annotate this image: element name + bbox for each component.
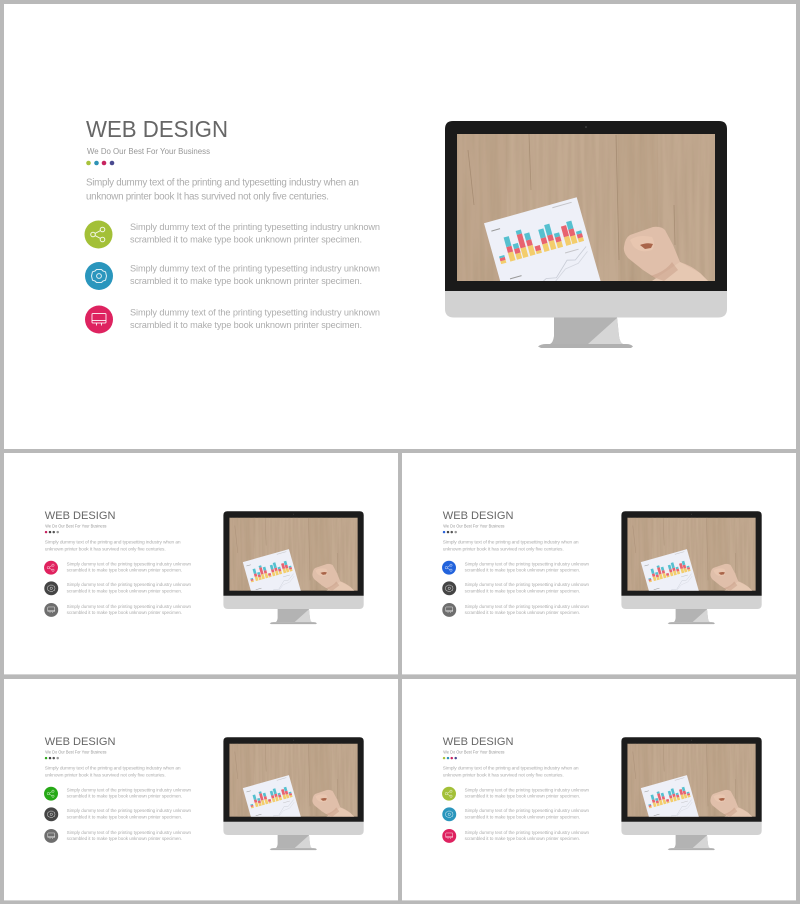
feature text 2: scrambled it to make type book unknown printer specimen.: [465, 588, 580, 593]
title: WEB DESIGN: [45, 736, 115, 748]
feature text 3: Simply dummy text of the printing typesetting industry unknown: [465, 830, 590, 835]
feature text 2: [67, 582, 192, 593]
intro text: Simply dummy text of the printing and typesetting industry when an: [443, 539, 579, 545]
subtitle: We Do Our Best For Your Business: [443, 524, 504, 529]
intro text: Simply dummy text of the printing and typesetting industry when an: [45, 765, 181, 771]
colour dots: [45, 757, 59, 759]
icon: gear: [44, 581, 58, 595]
intro text: [45, 765, 181, 778]
icon: monitor: [442, 829, 456, 843]
feature text 2: scrambled it to make type book unknown printer specimen.: [67, 588, 182, 593]
feature text 1: [130, 222, 380, 244]
intro text: unknown printer book It has survived not only five centuries.: [86, 192, 329, 202]
feature text 1: scrambled it to make type book unknown printer specimen.: [67, 794, 182, 799]
title: WEB DESIGN: [86, 116, 228, 142]
intro text: [45, 539, 181, 552]
icon: monitor: [44, 603, 58, 617]
feature text 2: scrambled it to make type book unknown printer specimen.: [130, 276, 362, 286]
subtitle: We Do Our Best For Your Business: [45, 750, 106, 755]
intro text: unknown printer book It has survived not only five centuries.: [45, 546, 166, 552]
feature text 1: Simply dummy text of the printing typesetting industry unknown: [67, 787, 192, 792]
feature text 2: [465, 582, 590, 593]
subtitle: We Do Our Best For Your Business: [443, 750, 504, 755]
monitor with photo: [445, 121, 727, 348]
icon: share: [44, 561, 58, 575]
feature text 1: Simply dummy text of the printing typesetting industry unknown: [130, 222, 380, 232]
panel: slide 4 green: [4, 679, 398, 900]
feature text 2: [130, 264, 380, 286]
feature text 2: Simply dummy text of the printing typesetting industry unknown: [465, 582, 590, 587]
feature text 1: scrambled it to make type book unknown printer specimen.: [67, 568, 182, 573]
feature text 1: Simply dummy text of the printing typesetting industry unknown: [67, 561, 192, 566]
intro text: unknown printer book It has survived not only five centuries.: [443, 546, 564, 552]
feature text 1: scrambled it to make type book unknown printer specimen.: [465, 568, 580, 573]
icon: share: [44, 787, 58, 801]
feature text 2: scrambled it to make type book unknown printer specimen.: [67, 814, 182, 819]
intro text: [443, 765, 579, 778]
panel: slide 2 pink: [4, 453, 398, 674]
icon: share: [84, 220, 112, 248]
title: WEB DESIGN: [45, 510, 115, 522]
feature text 1: [465, 787, 590, 799]
title: WEB DESIGN: [443, 510, 513, 522]
feature text 3: Simply dummy text of the printing typesetting industry unknown: [67, 830, 192, 835]
intro text: [86, 178, 359, 202]
intro text: Simply dummy text of the printing and typesetting industry when an: [443, 765, 579, 771]
feature text 1: scrambled it to make type book unknown printer specimen.: [130, 234, 362, 244]
feature text 3: scrambled it to make type book unknown printer specimen.: [130, 320, 362, 330]
colour dots: [45, 531, 59, 533]
panel: slide 5 multicolour: [402, 679, 796, 900]
feature text 3: Simply dummy text of the printing typesetting industry unknown: [130, 308, 380, 318]
monitor with photo: [223, 737, 364, 850]
feature text 3: [465, 604, 590, 615]
intro text: unknown printer book It has survived not only five centuries.: [45, 772, 166, 778]
feature text 2: Simply dummy text of the printing typesetting industry unknown: [130, 264, 380, 274]
icon: monitor: [44, 829, 58, 843]
intro text: Simply dummy text of the printing and typesetting industry when an: [45, 539, 181, 545]
feature text 3: [465, 830, 590, 841]
intro text: unknown printer book It has survived not only five centuries.: [443, 772, 564, 778]
subtitle: We Do Our Best For Your Business: [87, 146, 210, 156]
panel: main slide: [4, 4, 796, 449]
feature text 1: [465, 561, 590, 573]
icon: gear: [85, 262, 113, 290]
feature text 2: Simply dummy text of the printing typesetting industry unknown: [465, 808, 590, 813]
feature text 3: scrambled it to make type book unknown printer specimen.: [67, 610, 182, 615]
feature text 2: Simply dummy text of the printing typesetting industry unknown: [67, 582, 192, 587]
feature text 3: Simply dummy text of the printing typesetting industry unknown: [465, 604, 590, 609]
icon: gear: [442, 807, 456, 821]
feature text 2: [67, 808, 192, 819]
feature text 1: scrambled it to make type book unknown printer specimen.: [465, 794, 580, 799]
feature text 3: Simply dummy text of the printing typesetting industry unknown: [67, 604, 192, 609]
icon: share: [442, 561, 456, 575]
intro text: Simply dummy text of the printing and typesetting industry when an: [86, 178, 359, 188]
icon: monitor: [85, 306, 113, 334]
icon: monitor: [442, 603, 456, 617]
feature text 3: [67, 604, 192, 615]
feature text 1: [67, 787, 192, 799]
monitor with photo: [223, 511, 364, 624]
feature text 3: scrambled it to make type book unknown printer specimen.: [465, 836, 580, 841]
subtitle: We Do Our Best For Your Business: [45, 524, 106, 529]
feature text 2: [465, 808, 590, 819]
feature text 1: Simply dummy text of the printing typesetting industry unknown: [465, 561, 590, 566]
feature text 3: scrambled it to make type book unknown printer specimen.: [67, 836, 182, 841]
feature text 2: scrambled it to make type book unknown printer specimen.: [465, 814, 580, 819]
panel: slide 3 blue: [402, 453, 796, 674]
title: WEB DESIGN: [443, 736, 513, 748]
colour dots: [443, 531, 457, 533]
colour dots: [86, 161, 114, 165]
feature text 1: Simply dummy text of the printing typesetting industry unknown: [465, 787, 590, 792]
monitor with photo: [621, 737, 762, 850]
feature text 1: [67, 561, 192, 573]
feature text 3: [67, 830, 192, 841]
colour dots: [443, 757, 457, 759]
feature text 2: Simply dummy text of the printing typesetting industry unknown: [67, 808, 192, 813]
intro text: [443, 539, 579, 552]
icon: gear: [44, 807, 58, 821]
monitor with photo: [621, 511, 762, 624]
feature text 3: scrambled it to make type book unknown printer specimen.: [465, 610, 580, 615]
icon: gear: [442, 581, 456, 595]
feature text 3: [130, 308, 380, 330]
icon: share: [442, 787, 456, 801]
